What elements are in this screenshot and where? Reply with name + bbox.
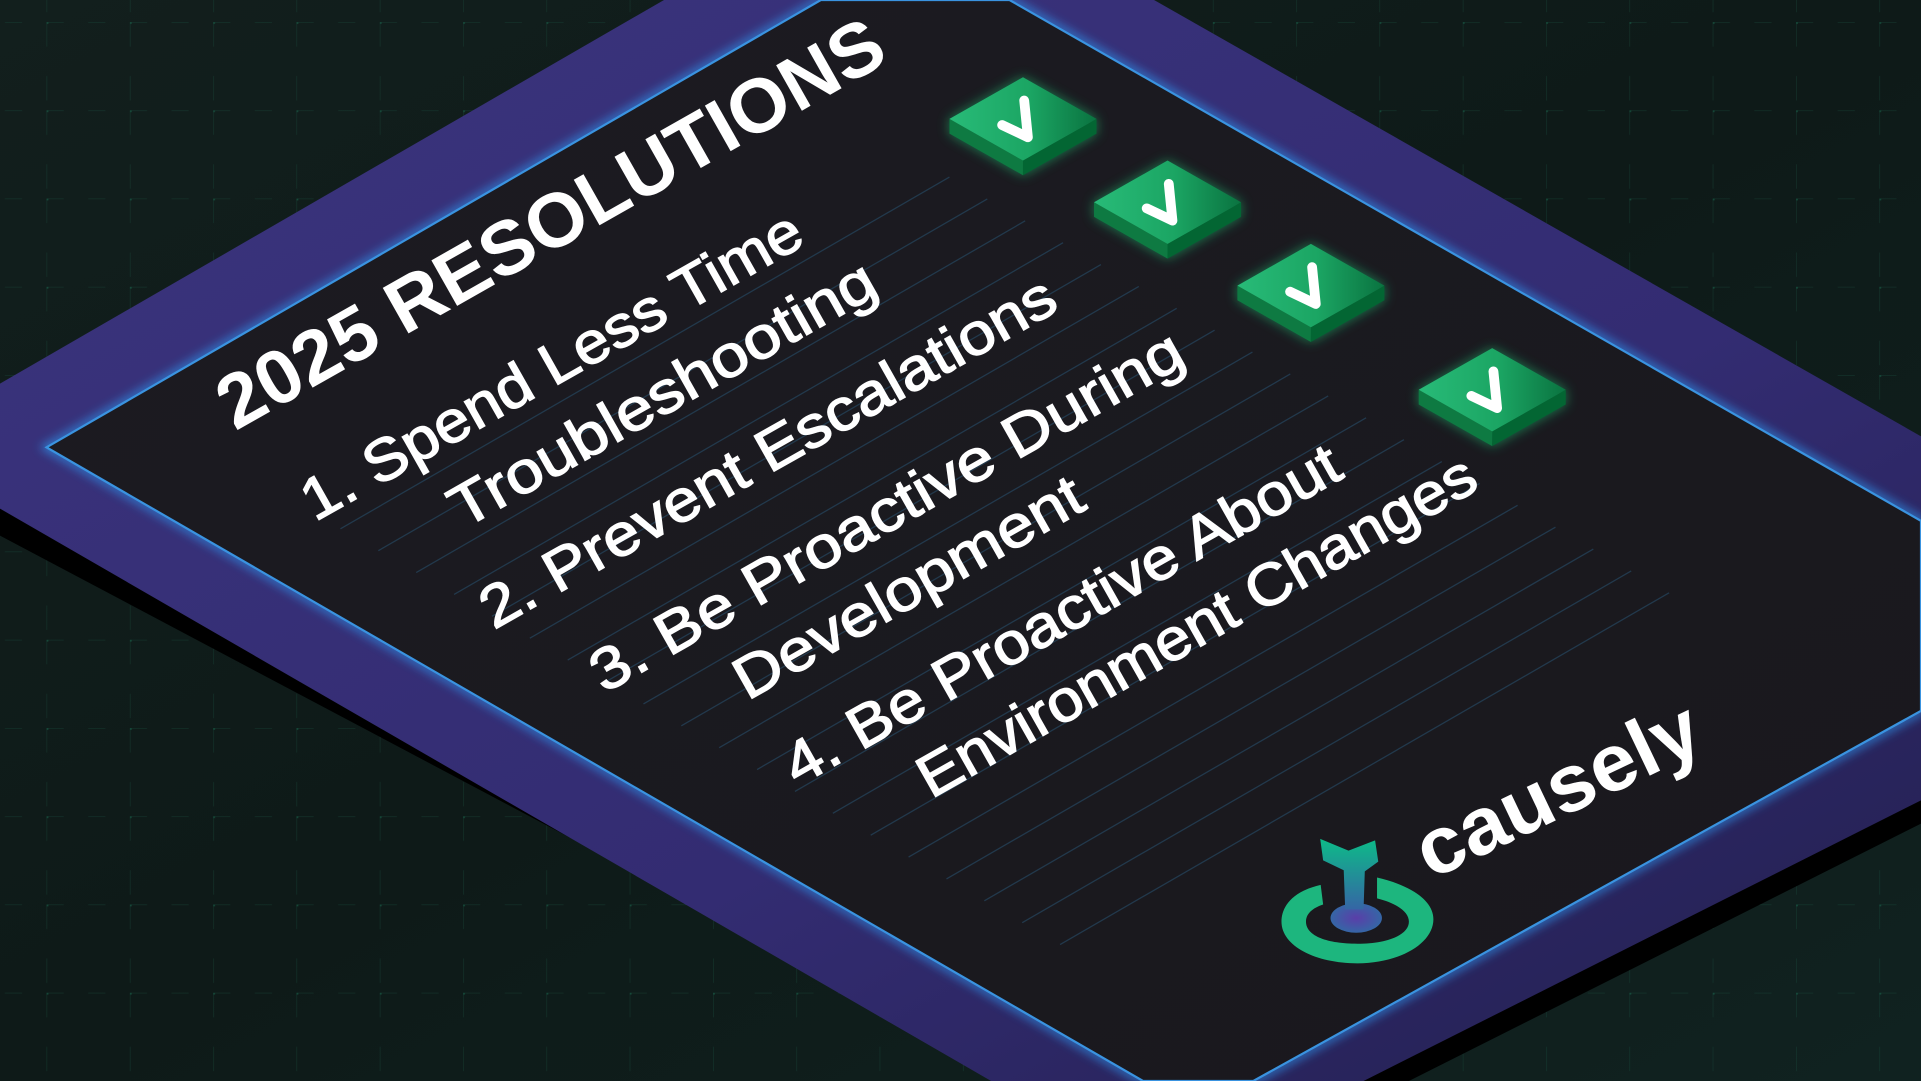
item 1 line 1: 1. Spend Less Time <box>289 198 814 533</box>
item 4 line 2: Environment Changes <box>905 442 1488 810</box>
item 4 line 1: 4. Be Proactive About <box>772 431 1352 798</box>
icon: checkbox 1 <box>949 77 1096 175</box>
logo: causely <box>1281 683 1715 963</box>
item 1 line 2: Troubleshooting <box>437 248 887 541</box>
title: 2025 RESOLUTIONS <box>202 1 899 446</box>
icon: checkbox 3 <box>1237 244 1384 342</box>
logo icon: target ring with arrow <box>1281 839 1433 963</box>
logo wordmark: causely <box>1400 683 1715 896</box>
icon: checkbox 2 <box>1094 161 1241 259</box>
item 3 line 2: Development <box>722 463 1095 712</box>
item 3 line 1: 3. Be Proactive During <box>578 318 1195 705</box>
resolution list <box>289 198 1488 810</box>
icon: checkbox 4 <box>1419 348 1566 446</box>
item 2: 2. Prevent Escalations <box>468 264 1067 641</box>
ruled lines <box>340 177 1669 945</box>
